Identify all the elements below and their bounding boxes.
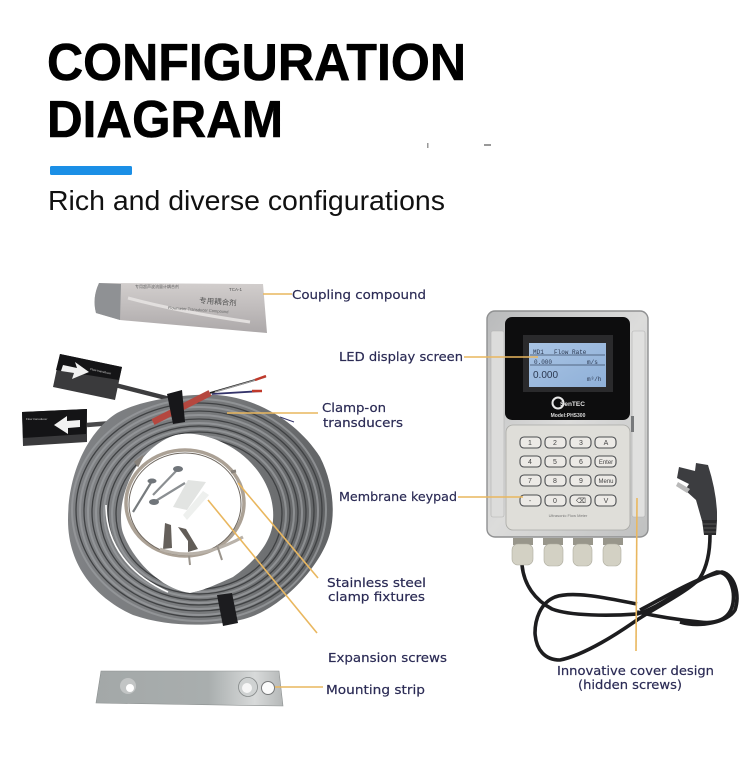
label: clamp-on transducers: Clamp-on — [322, 400, 386, 415]
membrane keypad: 1 — [528, 440, 532, 447]
mounting strip — [96, 671, 283, 706]
LCD screen: m/s — [587, 359, 598, 366]
transducer cables and wires — [87, 376, 294, 425]
label: coupling compound: Coupling compound — [292, 287, 426, 302]
label: stainless steel clamp fixtures: clamp fixtures — [328, 589, 425, 604]
coupling compound tube: Flowmeter Transducer Compound — [168, 305, 229, 314]
membrane keypad: 3 — [579, 440, 583, 447]
power plug — [676, 463, 717, 535]
LCD bezel — [523, 335, 613, 392]
membrane keypad: 6 — [579, 459, 583, 466]
membrane keypad: Enter — [599, 460, 613, 466]
subtitle: Rich and diverse configurations — [48, 185, 445, 216]
label: LED display screen: LED display screen — [339, 349, 463, 364]
coupling compound tube: 专用耦合剂 — [199, 295, 237, 308]
velcro strap: bottom — [217, 593, 238, 626]
LCD screen: Flow Rate — [554, 349, 587, 356]
title: CONFIGURATION — [47, 34, 466, 92]
label: expansion screws: Expansion screws — [328, 650, 447, 665]
label: innovative cover design: Innovative cover design — [557, 663, 714, 678]
transducer: left arrow — [22, 409, 87, 446]
membrane keypad: 8 — [553, 478, 557, 485]
membrane keypad: Ultrasonic Flow Meter — [549, 513, 588, 518]
LCD screen: m³/h — [587, 376, 602, 383]
cable glands — [512, 538, 623, 566]
accent bar — [50, 166, 132, 175]
transducer: right arrow: Flow transducer — [90, 367, 112, 375]
LCD screen: 0.000 — [533, 370, 558, 381]
label: clamp-on transducers — [322, 400, 403, 430]
brand logo: Model:PHS300 — [551, 413, 586, 419]
LCD screen: MD1 — [533, 349, 544, 356]
membrane keypad: 5 — [553, 459, 557, 466]
LCD screen — [529, 343, 606, 387]
leader lines — [208, 294, 637, 687]
brand logo — [551, 398, 586, 419]
label: clamp-on transducers: transducers — [323, 415, 403, 430]
label: stainless steel clamp fixtures — [327, 575, 426, 604]
membrane keypad: ⌫ — [576, 497, 586, 505]
black front panel — [505, 317, 630, 420]
transducer: left arrow: Flow transducer — [26, 417, 47, 421]
title line two: DIAGRAM — [47, 91, 283, 149]
brand logo: SenTEC — [560, 401, 585, 408]
LCD screen: 0.000 — [534, 359, 552, 366]
coupling compound tube: TCA-1 — [229, 287, 242, 292]
membrane keypad: - — [529, 498, 532, 505]
membrane keypad: 2 — [553, 440, 557, 447]
transducer: right arrow — [53, 354, 122, 400]
label: membrane keypad: Membrane keypad — [339, 489, 457, 504]
membrane keypad: 4 — [528, 459, 532, 466]
power cable — [522, 535, 737, 660]
flow meter device — [487, 311, 648, 537]
label: mounting strip: Mounting strip — [326, 682, 425, 697]
label: innovative cover design: (hidden screws) — [578, 677, 682, 692]
stray marks — [427, 143, 491, 148]
membrane keypad: Menu — [598, 479, 614, 485]
membrane keypad: 9 — [579, 478, 583, 485]
label: stainless steel clamp fixtures: Stainless steel — [327, 575, 426, 590]
label: innovative cover design — [557, 663, 714, 692]
red sleeve — [153, 393, 210, 422]
coupling compound tube — [95, 283, 267, 333]
membrane keypad: 7 — [528, 478, 532, 485]
membrane keypad: A — [604, 440, 609, 447]
velcro strap: top — [167, 390, 185, 424]
clamp ring, screws and fixtures — [126, 450, 244, 565]
membrane keypad: V — [604, 498, 609, 505]
cable coil — [68, 394, 333, 625]
membrane keypad: 0 — [553, 498, 557, 505]
coupling compound tube: 专用超声波流量计耦合剂 — [135, 283, 179, 289]
membrane keypad — [506, 425, 630, 530]
